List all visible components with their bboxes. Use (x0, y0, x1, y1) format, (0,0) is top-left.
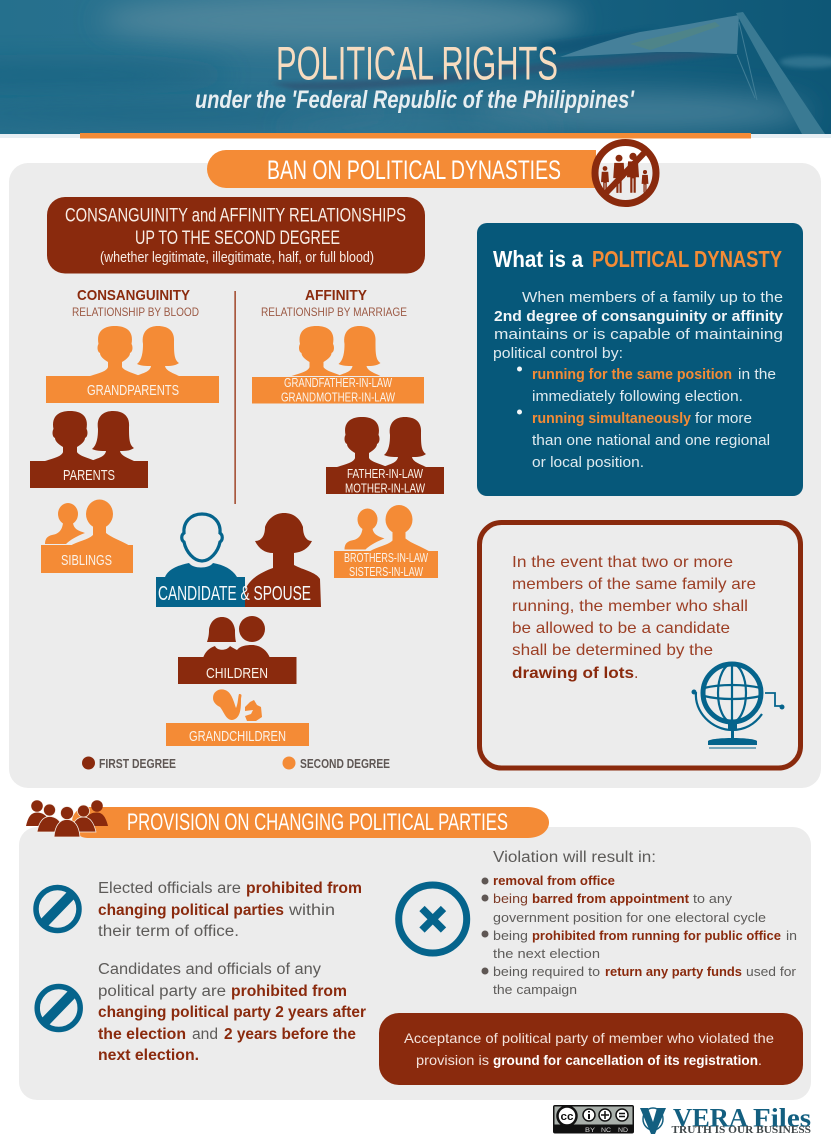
siblings-in-law: SISTERS-IN-LAW (349, 565, 423, 579)
creative commons badge: ND (618, 1127, 628, 1134)
violation list: used for (746, 964, 797, 979)
text: elected officials: Elected officials are (98, 880, 241, 897)
relationships heading box: (whether legitimate, illegitimate, half, or full blood) (100, 250, 374, 266)
header banner (0, 0, 831, 138)
panel: what is a political dynasty: POLITICAL DYNASTY (592, 246, 782, 272)
panel: what is a political dynasty: maintains or is capable of maintaining (494, 327, 783, 343)
violation list: government position for one electoral cycle (493, 910, 766, 925)
violation list: barred from appointment (532, 891, 690, 906)
section heading pill: BAN ON POLITICAL DYNASTIES (267, 155, 561, 185)
panel: drawing of lots: shall be determined by the (512, 642, 713, 659)
legend: first degree: FIRST DEGREE (99, 757, 176, 771)
panel: what is a political dynasty: What is a (493, 246, 583, 272)
column heading: consanguinity (72, 287, 199, 319)
violation list: the next election (493, 946, 600, 961)
grandparents (46, 326, 219, 403)
grandparents-in-law: GRANDMOTHER-IN-LAW (281, 390, 395, 404)
parents (30, 411, 148, 488)
panel: drawing of lots: members of the same family are (512, 576, 756, 593)
flag (270, 15, 739, 90)
siblings: SIBLINGS (61, 552, 112, 569)
text: candidates and officials: the election (98, 1026, 186, 1043)
violation list: being (493, 928, 528, 943)
relationships heading box (47, 197, 425, 274)
relationships heading box: CONSANGUINITY and AFFINITY RELATIONSHIPS (65, 206, 406, 226)
panel: ban on political dynasties (9, 142, 821, 788)
violation list: prohibited from running for public office (532, 928, 781, 943)
text: elected officials: within (288, 902, 335, 919)
children: CHILDREN (206, 665, 268, 682)
panel: what is a political dynasty: for more (695, 411, 752, 427)
text: elected officials: changing political parties (98, 902, 284, 919)
parents-in-law: MOTHER-IN-LAW (345, 482, 425, 496)
orange header rule (80, 133, 751, 138)
panel: what is a political dynasty (477, 223, 803, 496)
violation list: removal from office (493, 873, 615, 888)
icon: violation x mark (399, 885, 467, 953)
text: elected officials: their term of office. (98, 923, 239, 940)
column heading: consanguinity: CONSANGUINITY (77, 287, 190, 304)
siblings-in-law (334, 505, 438, 579)
creative commons badge: BY (585, 1127, 596, 1134)
panel: what is a political dynasty: running for the same position (532, 367, 732, 383)
panel: drawing of lots: drawing of lots (512, 665, 634, 682)
candidate and spouse: CANDIDATE & SPOUSE (158, 582, 311, 605)
siblings-in-law: BROTHERS-IN-LAW (344, 551, 428, 565)
panel: what is a political dynasty: When members of a family up to the (522, 290, 783, 306)
vera files logo: Files (753, 1104, 811, 1132)
icon: lottery globe (692, 664, 784, 748)
section heading pill (207, 150, 596, 188)
icon: prohibited sign 2 (37, 986, 80, 1030)
text: candidates and officials: next election. (98, 1047, 199, 1064)
text: elected officials (98, 880, 362, 940)
violation list: being required to (493, 964, 600, 979)
text: elected officials: prohibited from (246, 880, 362, 897)
panel: drawing of lots: . (634, 665, 638, 682)
section heading pill: PROVISION ON CHANGING POLITICAL PARTIES (127, 809, 508, 836)
grandchildren (166, 689, 309, 746)
panel: changing political parties (19, 800, 811, 1100)
column heading: consanguinity: RELATIONSHIP BY BLOOD (72, 305, 199, 319)
grandparents: GRANDPARENTS (87, 382, 179, 399)
callout: cancellation of registration: ground for cancellation of its registration (493, 1052, 758, 1068)
icon: group of people (26, 800, 108, 837)
violation list: Violation will result in: (493, 849, 656, 866)
candidate and spouse (156, 513, 321, 607)
text: candidates and officials: Candidates and officials of any (98, 961, 321, 978)
callout: cancellation of registration (379, 1013, 803, 1085)
parents-in-law: FATHER-IN-LAW (347, 467, 423, 481)
violation list: to any (693, 891, 732, 906)
text: candidates and officials: political party are (98, 983, 226, 1000)
grandparents-in-law (252, 326, 424, 404)
legend: second degree (282, 756, 390, 771)
panel: what is a political dynasty: in the (738, 367, 776, 383)
violation list: return any party funds (605, 964, 742, 979)
siblings (41, 500, 133, 573)
violation list: in (786, 928, 797, 943)
creative commons badge: NC (601, 1127, 611, 1134)
text: candidates and officials (98, 961, 366, 1064)
children (178, 616, 296, 684)
title: POLITICAL RIGHTS (276, 36, 558, 90)
parents: PARENTS (63, 467, 115, 484)
text: candidates and officials: changing political party 2 years after (98, 1004, 366, 1021)
icon: no family (590, 142, 660, 208)
panel: drawing of lots (480, 522, 800, 768)
icon: prohibited sign 1 (36, 888, 79, 930)
panel: drawing of lots: be allowed to be a candidate (512, 620, 730, 637)
flag pole (736, 12, 825, 134)
subtitle: under the 'Federal Republic of the Philippines' (195, 86, 635, 114)
callout: cancellation of registration: . (758, 1052, 762, 1068)
callout: cancellation of registration: Acceptance of political party of member who violated the (404, 1030, 774, 1046)
text: candidates and officials: prohibited from (231, 983, 347, 1000)
legend: second degree: SECOND DEGREE (300, 757, 390, 771)
text: candidates and officials: 2 years before the (224, 1026, 356, 1043)
panel: what is a political dynasty: immediately following election. (532, 389, 743, 405)
violation list: being (493, 891, 528, 906)
relationships heading box: UP TO THE SECOND DEGREE (135, 228, 340, 249)
grandparents-in-law: GRANDFATHER-IN-LAW (284, 376, 392, 390)
vera files logo: TRUTH IS OUR BUSINESS (672, 1125, 811, 1136)
vera files logo (640, 1104, 811, 1136)
violation list: the campaign (493, 982, 577, 997)
panel: drawing of lots: running, the member who shall (512, 598, 748, 615)
panel: drawing of lots: In the event that two or more (512, 554, 733, 571)
legend: first degree (82, 756, 176, 771)
panel: what is a political dynasty: or local position. (532, 455, 644, 471)
section heading pill (72, 807, 549, 838)
panel: what is a political dynasty: than one national and one regional (532, 433, 770, 449)
violation list (482, 849, 797, 997)
column heading: affinity: AFFINITY (305, 287, 367, 304)
callout: cancellation of registration: provision is (416, 1052, 489, 1068)
panel: what is a political dynasty: political control by: (493, 346, 623, 362)
creative commons badge (553, 1105, 634, 1134)
panel: what is a political dynasty: 2nd degree of consanguinity or affinity (494, 309, 783, 325)
vera files logo: VERA (673, 1104, 748, 1132)
panel: what is a political dynasty: running simultaneously (532, 411, 691, 427)
creative commons badge: cc (560, 1111, 574, 1123)
parents-in-law (326, 417, 444, 496)
column heading: affinity: RELATIONSHIP BY MARRIAGE (261, 305, 407, 319)
grandchildren: GRANDCHILDREN (189, 728, 286, 745)
column heading: affinity (261, 287, 407, 319)
text: candidates and officials: and (192, 1026, 218, 1043)
